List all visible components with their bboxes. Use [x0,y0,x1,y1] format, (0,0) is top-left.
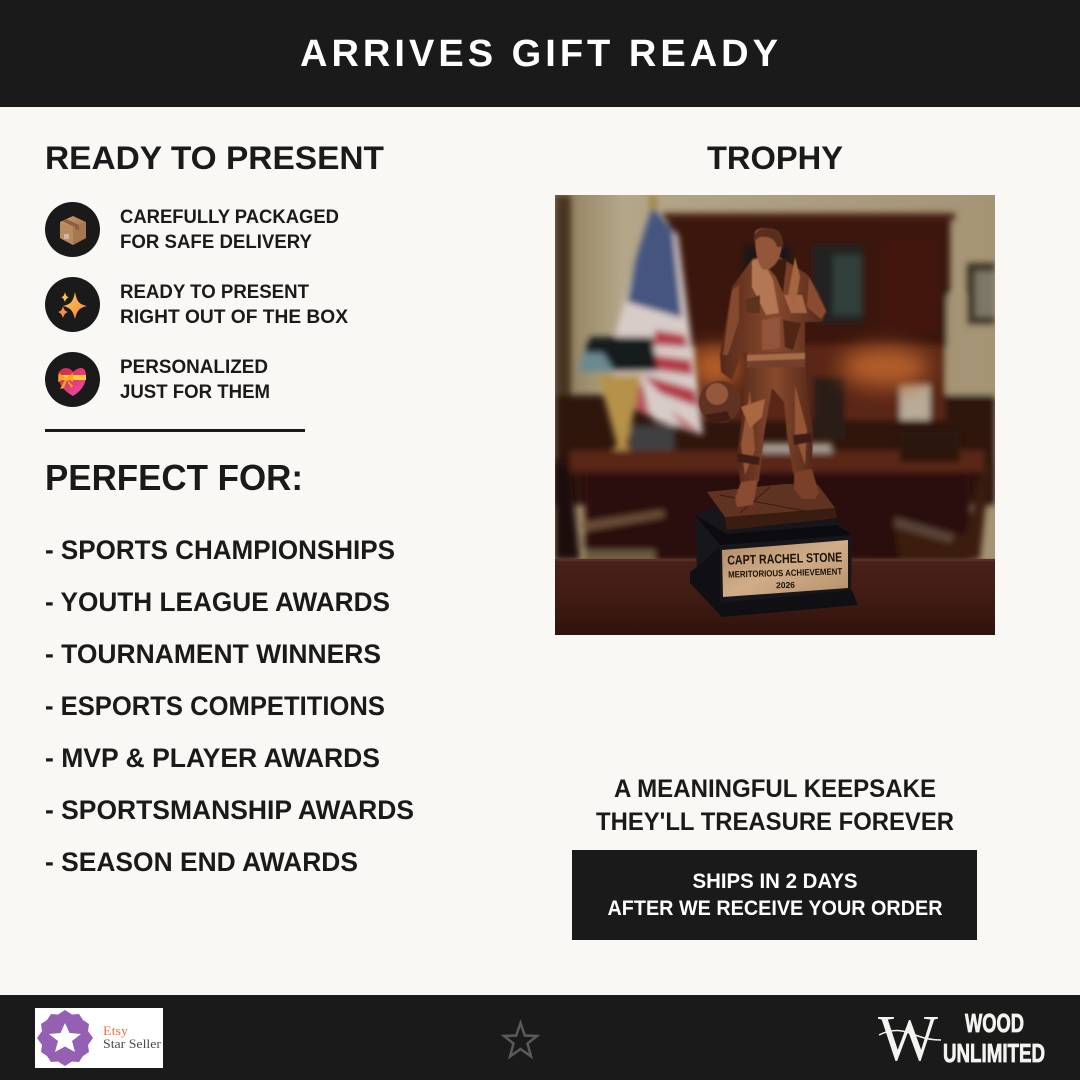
plaque [722,540,848,597]
occasions list: - MVP & PLAYER AWARDS [45,743,380,773]
legs [737,352,813,482]
thigh pocket [741,399,765,428]
footer band [0,995,1080,1080]
occasions list: - YOUTH LEAGUE AWARDS [45,587,390,617]
benefit: personalized: JUST FOR THEM [120,382,270,403]
icon: heart with ribbon [45,352,100,407]
table [555,559,995,635]
tagline [596,775,954,836]
shipping callout [572,850,977,940]
logo: wood unlimited: W [878,1002,939,1075]
occasions list: - SEASON END AWARDS [45,847,358,877]
title: ARRIVES GIFT READY [300,33,778,75]
occasions list: - ESPORTS COMPETITIONS [45,691,385,721]
bronze base [707,484,837,530]
icon: outline star [504,1023,537,1056]
niche with lights [695,345,945,420]
shipping callout: SHIPS IN 2 DAYS [692,870,858,893]
lamp [578,337,658,372]
occasions list: - SPORTSMANSHIP AWARDS [45,795,414,825]
torso and arms [720,257,827,380]
trophy photo: 2026 [776,580,795,590]
badge: etsy star seller [35,1008,163,1068]
occasions list: - SPORTS CHAMPIONSHIPS [45,535,395,565]
collar straps [752,257,779,315]
cabinet [667,217,950,347]
trophy photo: CAPT RACHEL STONE [727,549,843,568]
logo: wood unlimited: WOOD [965,1008,1024,1038]
desk [570,450,985,472]
lamp glow [691,347,930,387]
benefit: ready to present: READY TO PRESENT [120,282,309,303]
benefit: carefully packaged [45,202,339,257]
desk items [813,377,845,439]
chairs [555,460,580,560]
trophy photo: MERITORIOUS ACHIEVEMENT [728,566,843,580]
occasions list: - TOURNAMENT WINNERS [45,639,381,669]
boots [735,480,758,507]
chest pockets [762,317,780,350]
heading: trophy: TROPHY [707,140,843,176]
blurred office background [555,195,995,505]
benefit: carefully packaged: FOR SAFE DELIVERY [120,232,312,253]
framed picture [967,263,995,325]
bronze figure [699,228,827,507]
flag [613,207,703,435]
tagline: A MEANINGFUL KEEPSAKE [614,775,936,803]
heading: ready to present: READY TO PRESENT [45,140,384,176]
shipping callout: AFTER WE RECEIVE YOUR ORDER [608,897,942,920]
belt [747,350,805,368]
icon: package box [45,202,100,257]
occasions list [45,535,414,877]
head [755,228,782,270]
benefit: ready to present [45,277,348,332]
icon: sparkles [45,277,100,332]
header band [0,0,1080,107]
benefits list [45,202,348,407]
badge: etsy star seller: Etsy [103,1023,129,1038]
logo: wood unlimited [878,1002,1045,1075]
tagline: THEY'LL TREASURE FOREVER [596,808,954,836]
benefit: carefully packaged: CAREFULLY PACKAGED [120,207,339,228]
benefit: ready to present: RIGHT OUT OF THE BOX [120,307,348,328]
helmet [699,381,741,423]
benefit: personalized [45,352,270,407]
badge: etsy star seller: Star Seller [103,1036,162,1051]
right wall below cabinet [947,295,995,395]
benefit: personalized: PERSONALIZED [120,357,268,378]
black pedestal [695,507,852,607]
trophy photo [555,195,995,635]
heading: perfect for: PERFECT FOR: [45,457,303,498]
